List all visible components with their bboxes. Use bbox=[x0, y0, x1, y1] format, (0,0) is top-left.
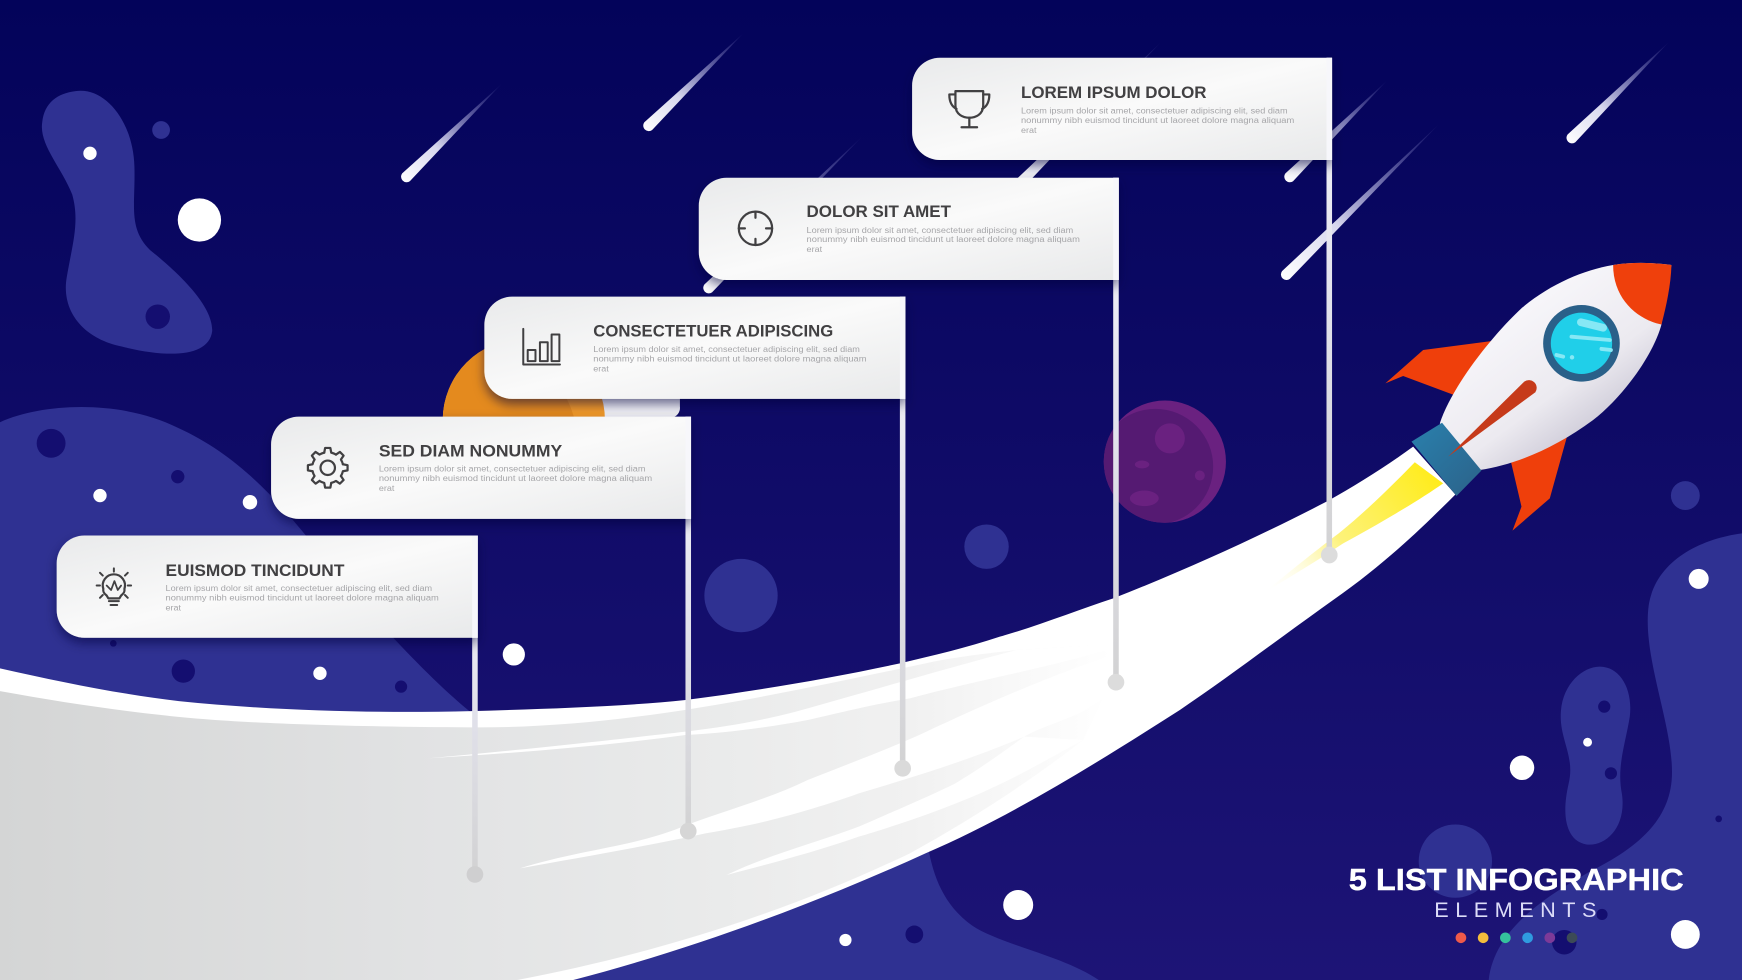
card 3 body: nonummy nibh euismod tincidunt ut laoreet dolore magna aliquam bbox=[593, 355, 867, 364]
card 5 heading: LOREM IPSUM DOLOR bbox=[1021, 83, 1207, 102]
planet bbox=[1098, 401, 1226, 524]
card 2 heading: SED DIAM NONUMMY bbox=[379, 442, 563, 461]
icon: target bbox=[739, 212, 772, 245]
card 1: Euismod tincidunt bbox=[57, 536, 478, 638]
card 3 body: Lorem ipsum dolor sit amet, consectetuer adipiscing elit, sed diam bbox=[593, 345, 860, 354]
rocket trail bbox=[0, 447, 1455, 980]
card 4 body: nonummy nibh euismod tincidunt ut laoreet dolore magna aliquam bbox=[807, 235, 1080, 244]
card 5 body: nonummy nibh euismod tincidunt ut laoreet dolore magna aliquam bbox=[1021, 116, 1294, 125]
red stripe bbox=[1448, 380, 1537, 457]
colour dots bbox=[1456, 932, 1577, 943]
card 5: Lorem ipsum dolor bbox=[912, 58, 1332, 160]
card 1 panel bbox=[57, 536, 478, 638]
card 3 heading: CONSECTETUER ADIPISCING bbox=[593, 322, 833, 341]
card 2 body: Lorem ipsum dolor sit amet, consectetuer adipiscing elit, sed diam bbox=[379, 465, 646, 474]
white dots bbox=[83, 147, 1709, 949]
card 5 panel bbox=[912, 58, 1332, 160]
rocket bbox=[1385, 263, 1671, 531]
card 3 edge bbox=[900, 297, 905, 399]
dark dots bbox=[37, 304, 1722, 954]
icon: light bulb bbox=[97, 568, 131, 605]
subtitle: ELEMENTS bbox=[1434, 897, 1596, 922]
card 1 body: nonummy nibh euismod tincidunt ut laoreet dolore magna aliquam bbox=[166, 594, 439, 603]
card 3 panel bbox=[484, 297, 905, 399]
card 1 heading: EUISMOD TINCIDUNT bbox=[166, 561, 345, 580]
lower fin bbox=[1511, 434, 1568, 531]
card 5 edge bbox=[1326, 58, 1332, 160]
card 1 body: erat bbox=[166, 604, 182, 613]
nose cone bbox=[1613, 263, 1671, 324]
yellow flame bbox=[1263, 462, 1443, 593]
body bbox=[1440, 263, 1671, 470]
card 2: Sed diam nonummy bbox=[271, 417, 691, 519]
card 2 body: erat bbox=[379, 484, 395, 493]
card 5 body: erat bbox=[1021, 126, 1037, 135]
card 2 panel bbox=[271, 417, 691, 519]
blob: left hill bbox=[0, 407, 472, 722]
icon: trophy bbox=[949, 91, 989, 127]
sun bbox=[442, 349, 605, 417]
card 2 stem bbox=[680, 417, 697, 839]
main title: 5 LIST INFOGRAPHIC bbox=[1349, 863, 1684, 897]
window bbox=[1543, 305, 1620, 382]
card 5 stem bbox=[1321, 58, 1338, 563]
blob: top left bbox=[42, 91, 212, 354]
card 1 edge bbox=[472, 536, 478, 638]
title block bbox=[1349, 863, 1684, 943]
card 3: Consectetuer adipiscing bbox=[484, 297, 905, 399]
card 3 stem bbox=[894, 297, 911, 777]
card 2 body bbox=[379, 465, 652, 493]
card 4 stem bbox=[1108, 178, 1124, 691]
card 1 body bbox=[166, 584, 439, 613]
card 2 edge bbox=[685, 417, 691, 519]
card 1 stem bbox=[467, 536, 483, 883]
card 4 body: erat bbox=[807, 245, 823, 254]
white streak bbox=[727, 737, 1083, 875]
card 5 body bbox=[1021, 106, 1294, 135]
blue circles bbox=[152, 121, 1700, 898]
left fin bbox=[1385, 341, 1491, 396]
engine band bbox=[1411, 423, 1481, 496]
blob: right side bbox=[1489, 533, 1742, 980]
card 1 body: Lorem ipsum dolor sit amet, consectetuer adipiscing elit, sed diam bbox=[166, 584, 432, 593]
card 4 body bbox=[807, 226, 1080, 254]
blob: bottom centre bbox=[533, 844, 1099, 980]
white trail bbox=[0, 447, 1455, 980]
card 5 body: Lorem ipsum dolor sit amet, consectetuer adipiscing elit, sed diam bbox=[1021, 106, 1288, 115]
icon: gear bbox=[308, 448, 348, 488]
card 2 body: nonummy nibh euismod tincidunt ut laoreet dolore magna aliquam bbox=[379, 474, 652, 483]
white streak bbox=[428, 643, 1129, 758]
card 3 body bbox=[593, 345, 867, 374]
card 3 body: erat bbox=[593, 365, 610, 374]
white streak bbox=[520, 650, 1155, 868]
card 4 heading: DOLOR SIT AMET bbox=[807, 202, 952, 221]
card 4 panel bbox=[699, 178, 1119, 280]
card 4 edge bbox=[1113, 178, 1119, 280]
grey shading bbox=[0, 643, 1129, 980]
card 4 body: Lorem ipsum dolor sit amet, consectetuer adipiscing elit, sed diam bbox=[807, 226, 1073, 235]
icon: bar chart bbox=[523, 329, 560, 364]
meteors bbox=[401, 33, 1669, 418]
card 4: Dolor sit amet bbox=[699, 178, 1119, 280]
blob: right inner bbox=[1561, 667, 1630, 845]
